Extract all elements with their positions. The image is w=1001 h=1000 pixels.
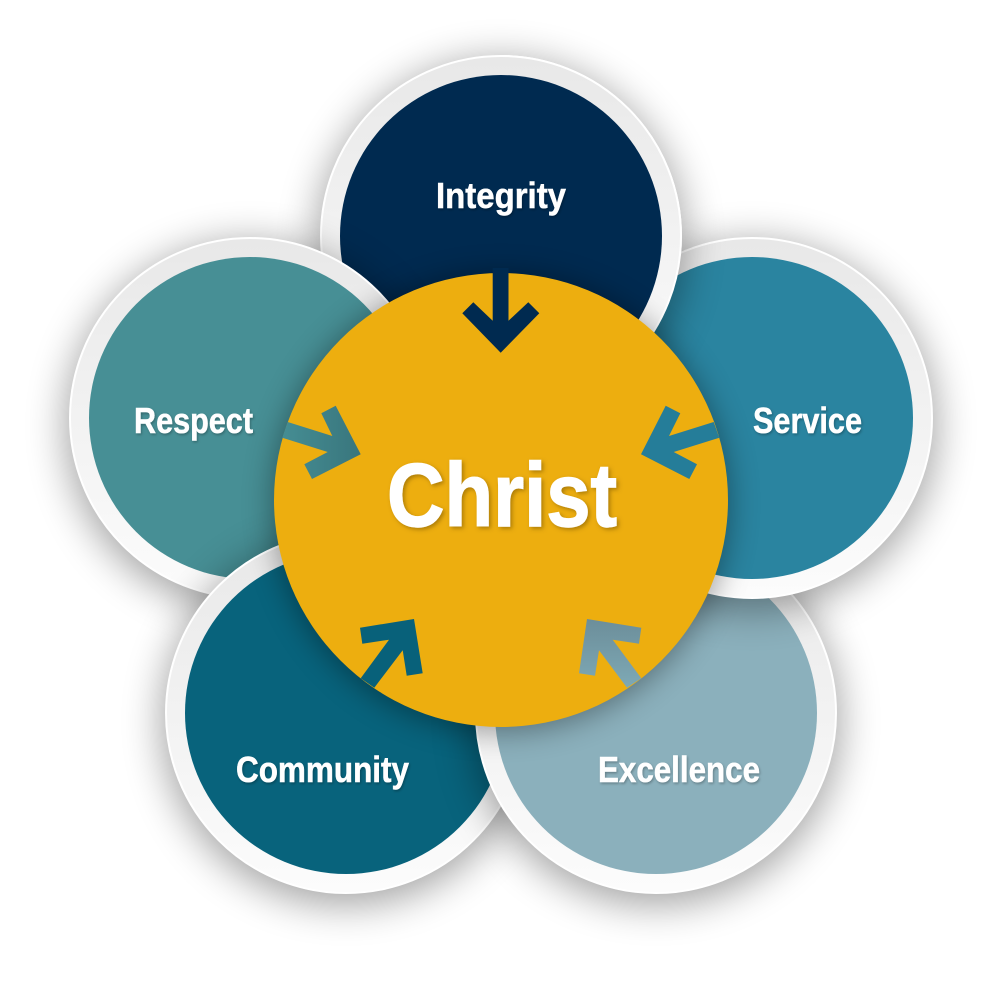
circle: Service [568,238,936,610]
arrow: Excellence [579,619,641,688]
circle: Integrity [317,56,685,428]
circle: Community [162,533,530,905]
circle: Respect [66,238,434,610]
shadow: Integrity falling on Service [654,242,709,350]
circle: Christ centre [272,273,730,732]
circle: Excellence [472,533,840,905]
label: Respect: Respect [134,400,253,441]
arrow: Respect [282,406,361,479]
arrow: Community [360,619,423,688]
label: Community: Community [236,749,409,790]
arrow: Service [641,406,719,479]
label: Integrity: Integrity [436,175,566,216]
arrow: Integrity [462,268,539,353]
label: Service: Service [753,400,862,441]
label: Christ: Christ [387,446,617,546]
label: Excellence: Excellence [598,749,760,790]
circle: Integrity overlap on Service [510,55,682,332]
